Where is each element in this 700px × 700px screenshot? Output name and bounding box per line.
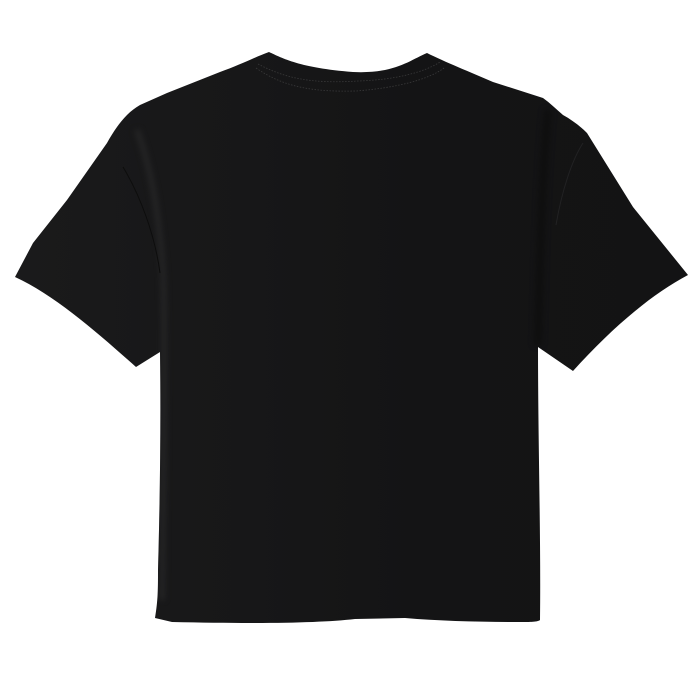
shading: right armhole fold — [538, 347, 539, 348]
shading: left armhole highlight — [137, 130, 164, 600]
collar stitching — [256, 62, 444, 91]
illustration: black t-shirt, back view — [15, 52, 688, 623]
left sleeve seam — [123, 167, 160, 273]
shirt silhouette — [15, 52, 688, 623]
right sleeve seam — [556, 143, 583, 225]
